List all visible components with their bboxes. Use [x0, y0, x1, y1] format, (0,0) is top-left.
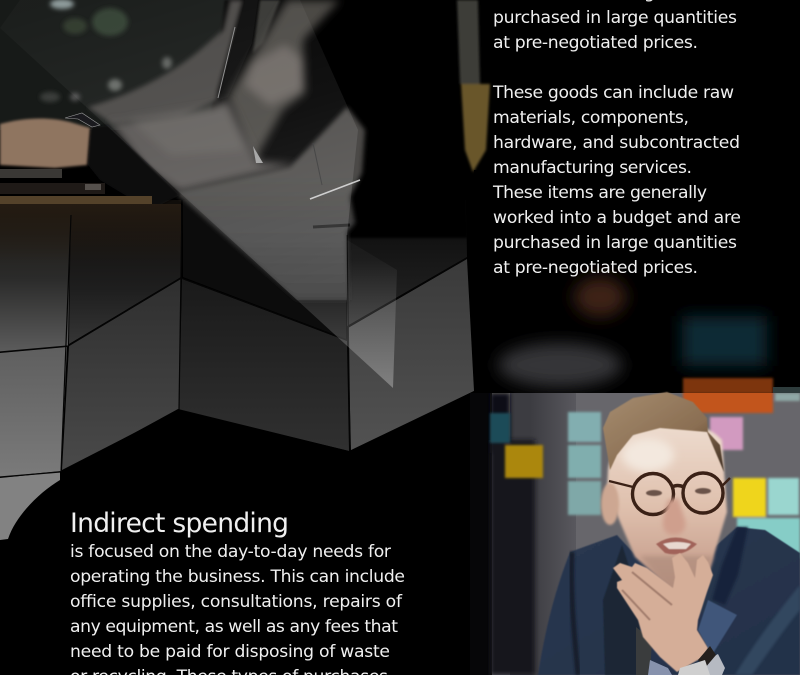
- stubble: [640, 556, 714, 595]
- nose: [663, 498, 686, 535]
- hand: [0, 118, 90, 168]
- text block: indirect spending description: any equipment, as well as any fees that: [70, 617, 398, 637]
- jacket main upper arm: [228, 0, 340, 163]
- watch: [678, 646, 716, 675]
- panel: fourth lower: [348, 259, 474, 451]
- pocket detail: [310, 143, 360, 227]
- panel: third upper: [183, 200, 346, 339]
- panel: far left bottom: [0, 472, 60, 540]
- navy jacket: [538, 527, 800, 675]
- sticky notes: [490, 390, 800, 558]
- face: [607, 422, 727, 592]
- panel: third lower: [179, 279, 349, 451]
- ear: [601, 483, 619, 525]
- wall panels: [0, 200, 474, 540]
- panel: far left upper: [0, 200, 71, 352]
- panel: fourth upper: [347, 200, 467, 326]
- text block: goods description: These goods can include raw: [492, 83, 734, 103]
- text block: goods description: [492, 0, 741, 278]
- photo: businessman at desk: [0, 0, 490, 300]
- text block: goods description: at pre-negotiated prices.: [493, 33, 698, 53]
- shirt and cuff: [636, 627, 725, 675]
- panel: second lower: [62, 279, 181, 470]
- hair: [603, 392, 724, 472]
- text block: indirect spending description: [70, 542, 405, 675]
- jacket forearm: [110, 100, 298, 192]
- text block: indirect spending description: is focused on the day-to-day needs for: [70, 542, 392, 562]
- jacket lapel strip: [253, 0, 280, 53]
- overlay: dark edge beside panels: [474, 170, 494, 395]
- heading: Indirect spending: Indirect spending: [70, 508, 289, 539]
- hand: [613, 553, 713, 672]
- diagonal light tip: [297, 240, 397, 388]
- text block: goods description: worked into a budget and are: [493, 208, 741, 228]
- black curved silhouette: [0, 391, 476, 675]
- text block: goods description: hardware, and subcontracted: [493, 133, 740, 153]
- dim reflection above photo: [498, 277, 800, 394]
- shirt cuff highlight: [253, 146, 263, 163]
- eyes: [646, 488, 711, 496]
- dark cuff: [88, 125, 180, 210]
- text block: goods description: purchased in large quantities: [493, 8, 737, 28]
- watch: [65, 113, 100, 127]
- strip and ochre object at right: [457, 0, 490, 172]
- text block: indirect spending description: office supplies, consultations, repairs of: [70, 592, 403, 612]
- diagonal light overlay: [0, 0, 358, 300]
- forehead highlight: [622, 438, 674, 472]
- right lapel: [698, 600, 737, 655]
- wall seam lines: [0, 205, 467, 477]
- text block: indirect spending description: need to be paid for disposing of waste: [70, 642, 390, 662]
- text block: goods description: at pre-negotiated prices.: [493, 258, 698, 278]
- jacket back sleeve: [88, 0, 243, 124]
- dark suit torso: [200, 0, 468, 238]
- text block: goods description: These items are generally: [492, 183, 707, 203]
- grey wall background: [470, 390, 800, 675]
- text block: indirect spending description: operating the business. This can include: [70, 567, 405, 587]
- glasses: [609, 473, 730, 514]
- text block: goods description: materials, components,: [493, 108, 689, 128]
- text block: goods description: manufacturing services.: [493, 158, 692, 178]
- jacket body: [175, 107, 365, 300]
- panel: second upper: [69, 200, 181, 344]
- left lapel: [603, 545, 640, 675]
- hand shading: [622, 572, 672, 620]
- mouth: [656, 538, 697, 554]
- text block: goods description: purchased in large quantities: [493, 233, 737, 253]
- panel: far left lower: [0, 347, 67, 477]
- photo: man speaking: [470, 277, 800, 675]
- notebooks and desk: [0, 169, 181, 262]
- shirt gap and white line: [218, 0, 258, 100]
- foliage background: [0, 0, 240, 130]
